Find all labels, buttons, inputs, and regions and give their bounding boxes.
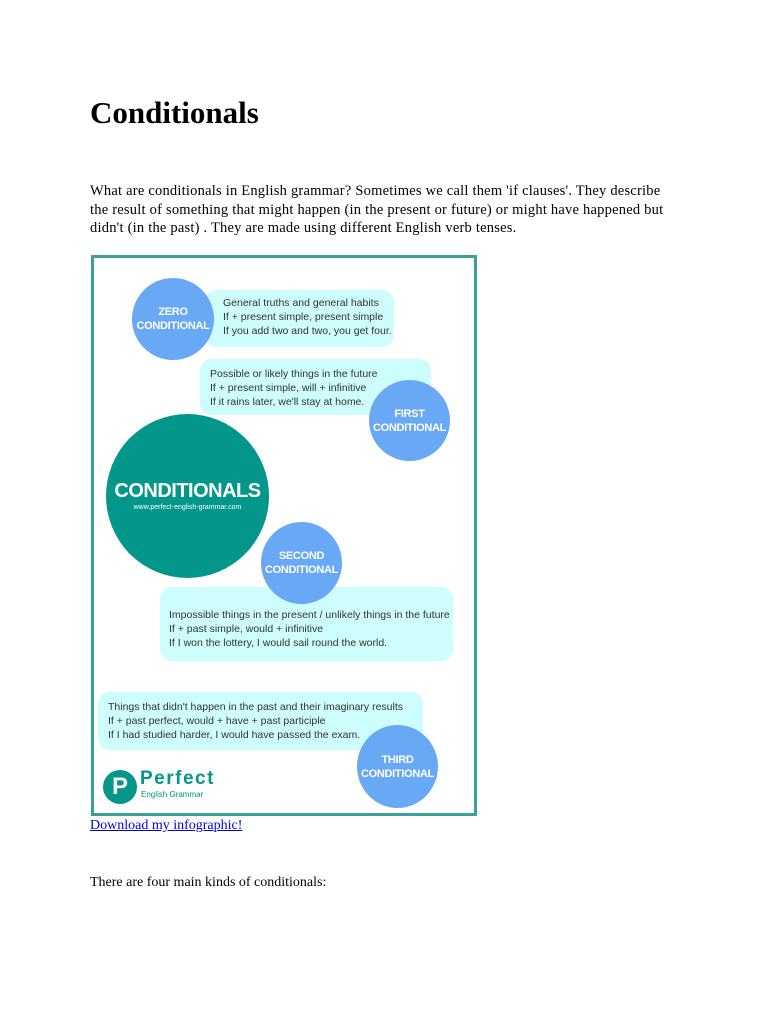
third conditional bubble: Things that didn't happen in the past and their imaginary results xyxy=(108,701,403,713)
first conditional bubble: If + present simple, will + infinitive xyxy=(210,382,366,394)
main conditionals circle: www.perfect-english-grammar.com xyxy=(134,504,241,511)
zero conditional bubble: If + present simple, present simple xyxy=(223,311,383,323)
zero conditional bubble: If you add two and two, you get four. xyxy=(223,325,392,337)
third conditional circle: CONDITIONAL xyxy=(361,768,434,780)
logo xyxy=(103,768,215,804)
first conditional circle: CONDITIONAL xyxy=(373,422,446,434)
first conditional circle: FIRST xyxy=(394,408,425,420)
third conditional bubble xyxy=(98,692,423,750)
second conditional circle xyxy=(261,522,342,604)
logo: English Grammar xyxy=(141,790,203,799)
logo: P xyxy=(112,773,128,800)
third conditional bubble: If I had studied harder, I would have passed the exam. xyxy=(108,729,360,741)
third conditional circle xyxy=(357,725,438,808)
first conditional bubble xyxy=(200,359,431,415)
main conditionals circle: CONDITIONALS xyxy=(114,480,261,502)
second conditional bubble: Impossible things in the present / unlikely things in the future xyxy=(169,609,450,621)
closing text: There are four main kinds of conditionals: xyxy=(90,875,326,890)
main conditionals circle xyxy=(106,414,269,578)
intro paragraph: didn't (in the past) . They are made using different English verb tenses. xyxy=(90,220,516,236)
first conditional bubble: Possible or likely things in the future xyxy=(210,368,378,380)
zero conditional bubble xyxy=(205,290,394,347)
second conditional circle: SECOND xyxy=(279,550,324,562)
zero conditional circle: ZERO xyxy=(158,306,188,318)
zero conditional circle xyxy=(132,278,214,360)
first conditional bubble: If it rains later, we'll stay at home. xyxy=(210,396,364,408)
download link: Download my infographic! xyxy=(90,818,242,833)
zero conditional bubble: General truths and general habits xyxy=(223,297,379,309)
title: Conditionals xyxy=(90,95,259,130)
intro paragraph: the result of something that might happen (in the present or future) or might have happened but xyxy=(90,202,663,218)
second conditional bubble: If I won the lottery, I would sail round the world. xyxy=(169,637,387,649)
second conditional bubble: If + past simple, would + infinitive xyxy=(169,623,323,635)
third conditional circle: THIRD xyxy=(381,754,414,766)
second conditional circle: CONDITIONAL xyxy=(265,564,338,576)
logo: Perfect xyxy=(140,768,215,789)
zero conditional circle: CONDITIONAL xyxy=(136,320,210,332)
infographic frame xyxy=(91,255,477,816)
first conditional circle xyxy=(369,380,450,461)
intro paragraph: What are conditionals in English grammar? Sometimes we call them 'if clauses'. They describe xyxy=(90,183,660,199)
intro paragraph xyxy=(90,183,664,236)
third conditional bubble: If + past perfect, would + have + past participle xyxy=(108,715,325,727)
second conditional bubble xyxy=(160,587,453,661)
